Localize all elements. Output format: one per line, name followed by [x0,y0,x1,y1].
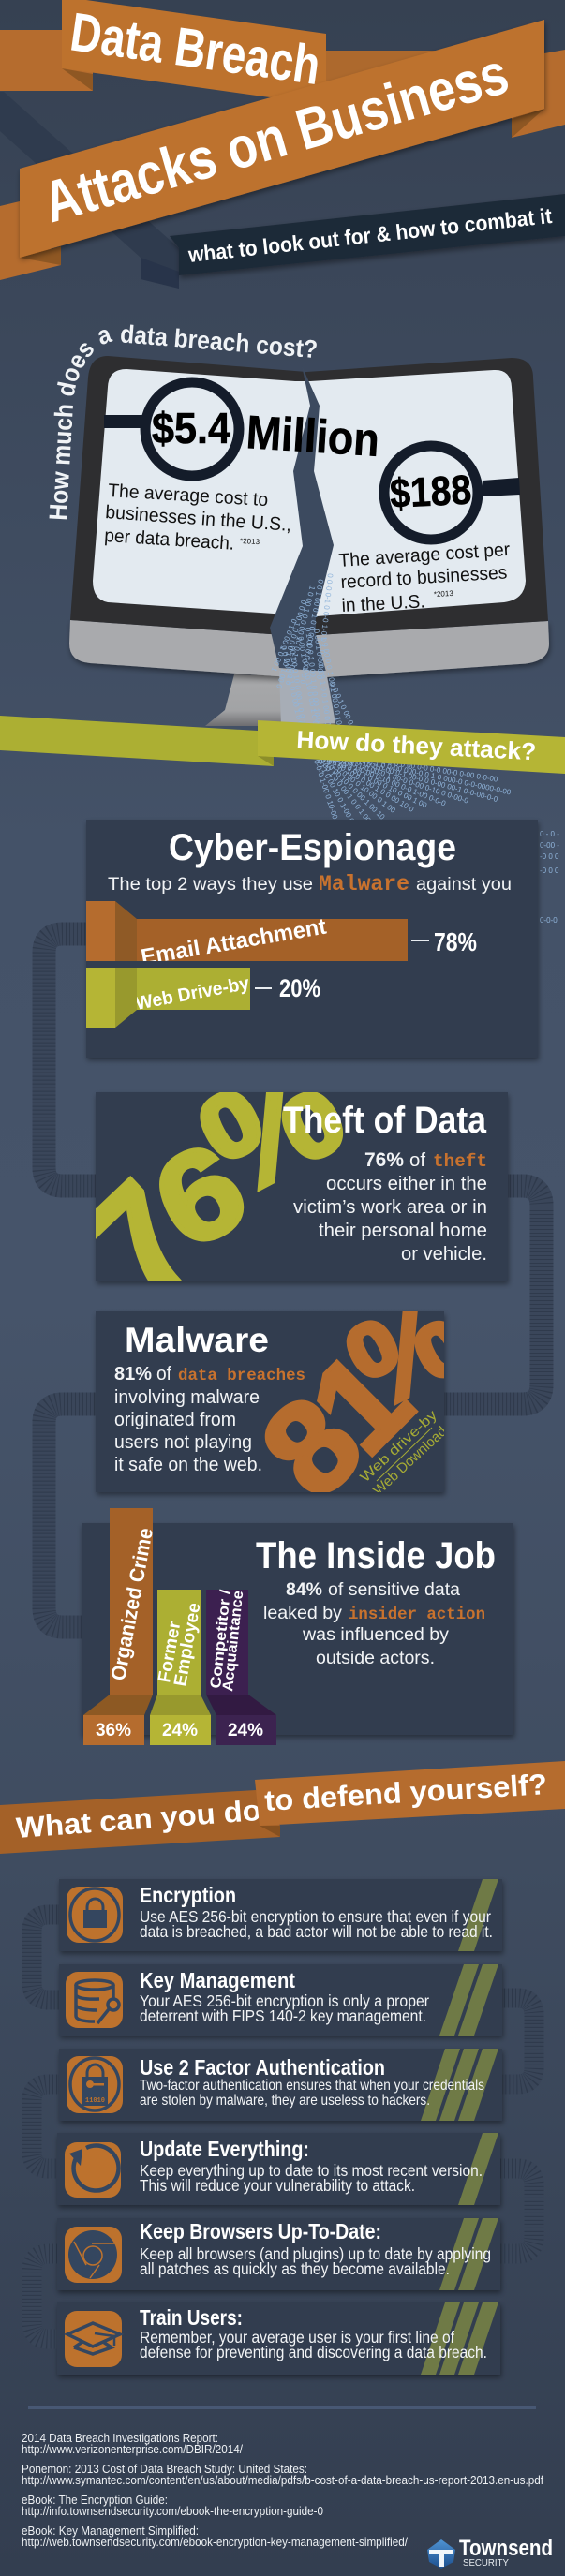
bar: email attachment: Email Attachment [139,914,328,970]
heading: Update Everything: [140,2137,309,2161]
heading: Theft of Data [283,1100,487,1141]
binary fan stream: 0-0-0 1-00 0 10-00 1 0 [312,759,343,833]
binary crack stream: 0 1 0 00 1 0 00 1 [269,617,298,674]
body text: of [409,1150,425,1171]
left description: The average cost to [108,481,269,511]
body text: users not playing [114,1432,252,1453]
body text [263,1579,485,1668]
binary fan stream: 0 0 00 10 0 0 00 1 0 0 00 10 0 [325,755,416,814]
binary crack stream [269,573,358,750]
binary crack stream: 0 00 1 0 00 0 10 0 00 1 0 0 0 10 0 [296,636,324,748]
body text: of [156,1364,171,1384]
vector labels: Web Download [370,1424,450,1499]
references: http://www.verizonenterprise.com/DBIR/2014/ [22,2443,243,2456]
big 76 percent: 6 [132,1115,268,1277]
body text: or vehicle. [401,1244,487,1265]
big 81 percent: % [327,1264,486,1435]
body text: leaked by [263,1603,342,1623]
bar: email attachment: 78% [434,927,477,956]
heading: Malware [125,1321,269,1359]
heading: The Inside Job [256,1535,496,1577]
body text [114,1364,305,1475]
big 76 percent: % [176,1023,367,1228]
title: Data Breach: Data Breach [67,2,324,96]
bar: organized crime: 36% [96,1721,131,1740]
monitor stand [205,674,335,726]
panel: keep browsers up to date [57,2218,500,2290]
bar: organized crime [83,1508,157,1745]
body text [293,1149,487,1265]
panel: the inside job [82,1508,513,1745]
heading: curved cost question: How much does a data breach cost? [49,324,317,519]
binary fan stream: 00-0-0 10-0 0-00 0-1 00-0 0 0-00 00-1 0-0-00-0-0 [338,753,499,804]
binary crack stream: 0 0 1 00 0 1 0 0 00 1 0 0 0 1 0 [279,645,308,745]
big 76 percent: 7 [50,1150,231,1334]
subheading [108,872,512,896]
bar: email attachment [86,901,476,961]
binary fan stream: 0 0-00 1-0 00-0 1 00-0 0-00 0-10 0 0-00-0 [335,754,470,806]
body text: 76% [364,1149,404,1171]
panel: encryption [59,1879,502,1951]
monitor: Million [245,406,381,466]
bar: former employee: Former [155,1620,185,1684]
binary fan stream: 0-0-0 00-1 0-0 0 00 0-0 0-0 00-0 0-00 0-0-00 [351,752,499,784]
big 81 percent: 1 [282,1325,438,1480]
subheading: Malware [319,872,409,896]
bar: competitor or acquaintance: Acquaintance [220,1590,246,1692]
binary crack stream: 1 0 00 1 0 0 00 10 0 1 0 00 1 0 [284,585,317,687]
binary fan stream: 00 1 0 00 10 0 1-00 0-0 [315,758,359,831]
bar: former employee: 24% [162,1721,198,1740]
right description [338,540,511,616]
references [22,2432,543,2549]
left description [104,481,292,555]
body text: theft [433,1151,487,1172]
heading: Use 2 Factor Authentication [140,2055,385,2080]
ribbon: what can you do to defend yourself: What can you do [15,1794,262,1844]
references: eBook: Key Management Simplified: [22,2524,199,2538]
body text [140,2161,483,2195]
logo: townsend security [427,2536,553,2569]
body text: occurs either in the [326,1174,487,1194]
body text: data breaches [178,1367,305,1385]
body text: defense for preventing and discovering a data breach. [140,2343,487,2361]
panel: cyber-espionage [86,820,538,1058]
panel: theft of data [94,1092,512,1287]
subheading: The top 2 ways they use [108,875,313,895]
body text: of sensitive data [328,1579,460,1600]
monitor chin [69,620,549,677]
ribbon: what can you do to defend yourself: to defend yourself? [263,1768,548,1817]
binary fan stream: 00 10 0 00 1 0 00 0 10 0 00 1 00 [327,755,429,810]
big 81 percent: 8 [233,1369,389,1524]
bar: former employee [150,1590,211,1745]
bar: former employee: Employee [171,1602,205,1688]
icon: graduation cap [65,2311,122,2367]
icon: lock with key [67,2056,123,2113]
binary fan stream: 0 00 1 0 0 00 1 0 0 1 00 [317,757,373,824]
binary fan stream: -0 0 0 [540,866,559,875]
body text: outside actors. [316,1648,435,1668]
logo: townsend security: SECURITY [463,2558,509,2569]
binary crack stream: 0 0 0 1 0 00 0 1 [328,681,358,733]
bar: organized crime: Organized Crime [106,1526,157,1682]
binary crack stream: 0 0-0 0-1 0 0-0 1-0 0 1 0 0 0 0-0 [315,573,335,680]
binary fan stream: 0 10 00 10 0 0 00 1 00 10 [320,756,387,822]
body text [140,1991,429,2025]
body text: Keep everything up to date to its most recent version. [140,2161,483,2180]
body text: was influenced by [302,1624,449,1645]
body text [140,2328,487,2361]
body text [140,2244,491,2278]
ribbon: what can you do to defend yourself [0,1761,565,1854]
panel: malware [94,1311,448,1497]
stat: 5.4 million: $5.4 [152,404,230,452]
heading: how do they attack: How do they attack? [296,725,537,765]
ribbon: how do they attack [0,716,565,774]
icon: refresh arrow [65,2142,121,2198]
panel: train users [57,2302,500,2375]
heading: Cyber-Espionage [169,827,456,868]
monitor screen [93,369,526,616]
binary fan stream: 00 1 0 0 00 0 10 00 0 1 00 [322,755,397,815]
left description: per data breach. [104,526,235,555]
crack on stand [279,671,335,726]
body text: involving malware [114,1387,260,1408]
dark subtitle ribbon back [0,92,179,289]
binary crack stream: 0 1 00 0 1 0 00 1 0 0 00 10 0 1 0 0 [304,627,324,742]
body text: originated from [114,1410,236,1430]
heading: Encryption [140,1883,236,1907]
heading: Train Users: [140,2305,243,2330]
binary crack stream: 0 0 1 00 0 1 0 0 00 1 0 0 0 1 0 0 [298,579,325,685]
vector labels: Web drive-by [357,1407,440,1486]
references: http://web.townsendsecurity.com/ebook-encryption-key-management-simplified/ [22,2536,408,2549]
right description: record to businesses [340,562,508,593]
heading: Key Management [140,1968,295,1992]
binary fan stream: 0-0-0 [540,916,558,925]
title ribbon: Data Breach [0,0,440,97]
binary fan stream: 0 - 0 - [540,830,559,838]
binary fan stream: 0-0 00 1-0 00 0-10 00 0-0 1-00 0-0-0 [331,755,448,808]
right description: The average cost per [338,540,511,571]
binary fan stream: -0 0 0 [540,852,559,861]
references: Ponemon: 2013 Cost of Data Breach Study: United States: [22,2463,307,2476]
binary fan stream [312,752,559,925]
crack [270,365,334,672]
right circle [384,446,478,540]
body text: 81% [114,1364,152,1384]
big 76 percent [96,1092,343,1281]
panel: two factor authentication [59,2049,502,2121]
body text: all patches as quickly as they become available. [140,2259,450,2278]
left circle [145,382,239,476]
connector pipes [32,934,542,2339]
body text: insider action [349,1606,485,1624]
bar: web drive-by [86,968,320,1028]
binary crack stream: 0 00 1 0 0 0 00 1 0 0 1 00 0 1 0 [312,629,334,733]
binary fan stream: 0-0 00-0-1 0 0-00 000-0 0 1-0 000-0 0-0-0000-0-00 [345,753,513,797]
binary crack stream: 1 0 00 0 0 1 00 1 00 0 0 10 0 0 [320,636,346,738]
references: http://info.townsendsecurity.com/ebook-the-encryption-guide-0 [22,2505,323,2518]
references: 2014 Data Breach Investigations Report: [22,2432,218,2445]
body text: Keep all browsers (and plugins) up to date by applying [140,2244,491,2263]
icon: lock with key: 11010 [85,2097,105,2105]
body text: deterrent with FIPS 140-2 key management. [140,2006,426,2025]
left description: *2013 [240,537,260,546]
vector labels [359,1411,444,1492]
references: eBook: The Encryption Guide: [22,2494,168,2507]
stat: 188: $188 [389,467,472,517]
panel: key management [59,1964,502,2036]
subtitle ribbon [170,194,565,275]
body text: victim’s work area or in [293,1197,487,1218]
right description: *2013 [434,589,454,599]
body text: 84% [286,1579,322,1600]
body text: it safe on the web. [114,1455,262,1475]
body text [140,2078,484,2109]
left circle band [104,415,142,428]
body text: Remember, your average user is your first line of [140,2328,454,2347]
body text: are stolen by malware, they are useless to hackers. [140,2093,430,2109]
body text: data is breached, a bad actor will not be able to read it. [140,1922,493,1941]
references: http://www.symantec.com/content/en/us/about/media/pdfs/b-cost-of-a-data-breach-us-report-2013.en-us.pdf [22,2474,543,2487]
bar: web drive-by: 20% [279,974,320,1002]
body text: This will reduce your vulnerability to attack. [140,2176,415,2195]
left description: businesses in the U.S., [105,502,292,536]
right description: in the U.S. [341,591,425,616]
icon: database key [66,1972,123,2028]
bar: web drive-by: Web Drive-by [134,973,252,1014]
body text: their personal home [319,1221,487,1241]
body text: Use AES 256-bit encryption to ensure that even if your [140,1907,491,1926]
icon: lock [67,1887,123,1943]
body text: Your AES 256-bit encryption is only a proper [140,1991,429,2010]
monitor [69,356,549,726]
body text: Two-factor authentication ensures that when your credentials [140,2078,484,2094]
monitor bezel [70,356,548,635]
binary fan stream: 0-00 - [540,841,559,850]
bar: competitor or acquaintance [206,1589,276,1745]
heading: Keep Browsers Up-To-Date: [140,2219,381,2243]
binary crack stream: 00 1 0 0 10 0 00 1 0 0 1 0 0 0 1 [288,645,310,750]
icon: browser [65,2227,122,2283]
title ribbon: Attacks on Business [0,20,565,280]
subheading: against you [416,875,512,895]
bar: competitor or acquaintance: Competitor / [208,1589,234,1689]
bar: competitor or acquaintance: 24% [228,1721,263,1740]
right circle band [483,478,520,496]
panel: update everything [57,2133,500,2205]
body text [140,1907,493,1941]
binary crack stream: 0 0 00 1 0 0 0 0 1 00 1 00 0 [275,599,308,690]
